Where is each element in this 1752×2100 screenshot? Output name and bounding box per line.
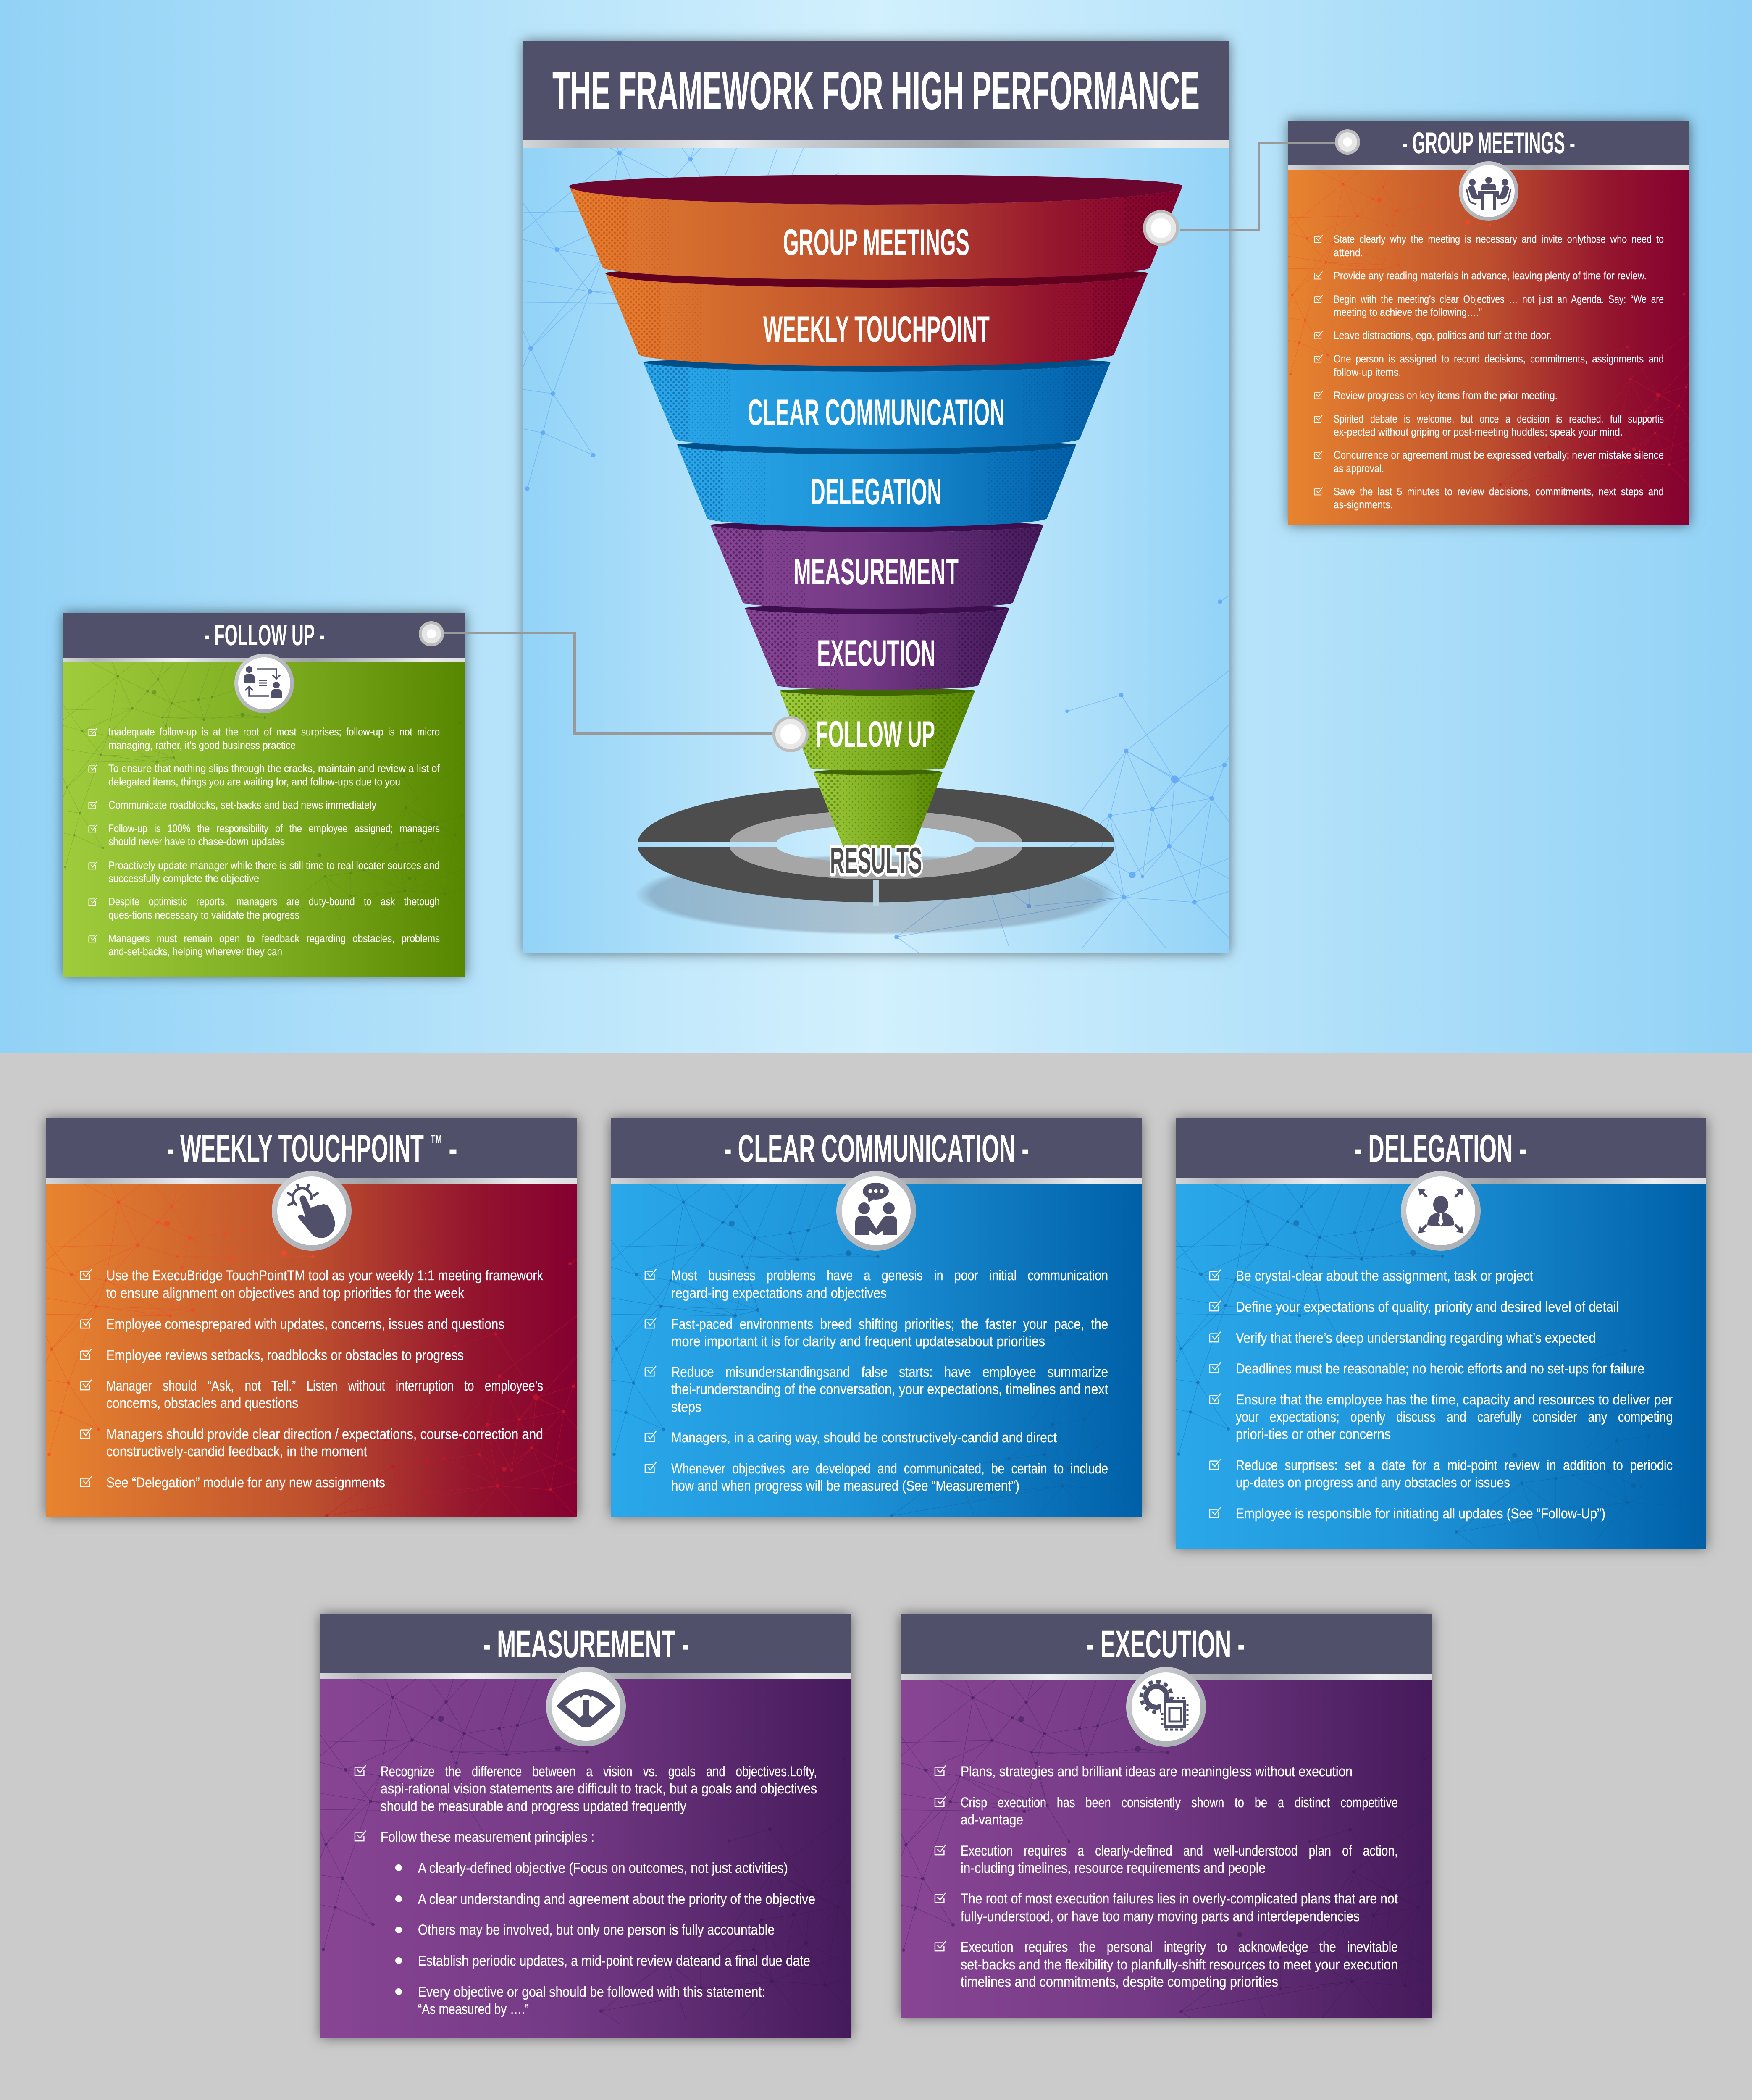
checklist: group meetings: meeting to achieve the following….” [1334,307,1482,318]
funnel segment: weekly touchpoint: WEEKLY TOUCHPOINT [763,308,990,350]
checklist: delegation: priori-ties or other concerns [1236,1426,1391,1442]
checklist: follow up [89,726,440,958]
funnel segment: group meetings: GROUP MEETINGS [783,221,969,263]
checklist: delegation: Verify that there’s deep understanding regarding what’s expected [1236,1330,1596,1346]
icon: gear and chip [1126,1667,1206,1747]
checklist: group meetings: Leave distractions, ego, politics and turf at the door. [1334,330,1552,341]
checklist: weekly touchpoint [81,1268,544,1491]
panel: group meetings [1288,121,1689,525]
checklist: clear communication: regard-ing expectations and objectives [671,1285,887,1301]
funnel segment: clear communication: CLEAR COMMUNICATION [748,391,1005,433]
checklist: clear communication: more important it is for clarity and frequent updatesabout priorities [671,1334,1045,1349]
icon: manager with arrows outward [1401,1171,1481,1251]
checklist: group meetings: Review progress on key items from the prior meeting. [1334,390,1558,402]
checklist: delegation: Be crystal-clear about the assignment, task or project [1236,1268,1533,1284]
funnel segment: delegation [677,441,1076,529]
funnel segment: group meetings [569,175,1182,286]
checklist: delegation: up-dates on progress and any obstacles or issues [1236,1475,1510,1491]
checklist: execution: ad-vantage [961,1812,1023,1828]
checklist: weekly touchpoint: See “Delegation” module for any new assignments [106,1475,385,1491]
connector: group meetings [1138,122,1365,252]
checklist: follow up: Communicate roadblocks, set-backs and bad news immediately [108,799,376,811]
checklist: execution: timelines and commitments, despite competing priorities [961,1974,1278,1990]
checklist: follow up: successfully complete the objective [108,873,259,885]
checklist: execution: in-cluding timelines, resource requirements and people [961,1860,1266,1876]
icon: two people talking [836,1171,916,1251]
funnel tip segment [811,769,945,850]
checklist: follow up: and-set-backs, helping wherever they can [108,946,282,958]
funnel segment: measurement: MEASUREMENT [793,551,959,592]
checklist: follow up: delegated items, things you are waiting for, and follow-ups due to you [108,776,400,788]
checklist: weekly touchpoint: constructively-candid feedback, in the moment [106,1444,367,1460]
icon: pointing hand touch [272,1171,352,1251]
checklist: weekly touchpoint: Employee comesprepared with updates, concerns, issues and questions [106,1316,504,1332]
checklist: delegation [1210,1268,1673,1522]
checklist: group meetings: ex-pected without griping or post-meeting huddles; speak your mind. [1334,426,1623,438]
funnel segment: delegation: DELEGATION [811,471,942,512]
checklist: weekly touchpoint: Employee reviews setbacks, roadblocks or obstacles to progress [106,1347,464,1363]
results label: RESULTS [830,840,922,881]
funnel segment: clear communication [643,357,1111,452]
checklist: execution: Plans, strategies and brilliant ideas are meaningless without execution [961,1764,1353,1780]
checklist: clear communication [645,1268,1108,1494]
checklist: group meetings: as approval. [1334,463,1384,475]
icon: people at a meeting table [1459,161,1518,221]
target ring: results [635,786,1118,935]
checklist: follow up: To ensure that nothing slips through the cracks, maintain and review a list of [108,763,440,774]
heading: - FOLLOW UP - [204,619,325,651]
checklist: group meetings: follow-up items. [1334,367,1401,378]
panel: weekly touchpoint [46,1118,577,1517]
panel: follow up [63,613,465,976]
heading: - EXECUTION - [1087,1623,1245,1666]
checklist: measurement [355,1764,817,2017]
checklist: measurement: Others may be involved, but only one person is fully accountable [418,1922,775,1938]
checklist: follow up: ques-tions necessary to validate the progress [108,909,299,921]
checklist: measurement: should be measurable and progress updated frequently [381,1798,686,1814]
panel: execution [901,1614,1432,2018]
funnel segment: execution: EXECUTION [817,632,935,674]
checklist: clear communication: Managers, in a caring way, should be constructively-candid and direct [671,1430,1057,1446]
checklist: weekly touchpoint: concerns, obstacles and questions [106,1395,298,1411]
checklist: clear communication: steps [671,1399,701,1415]
heading: - [449,1127,457,1170]
checklist: clear communication: how and when progress will be measured (See “Measurement”) [671,1478,1019,1494]
checklist: measurement: Every objective or goal should be followed with this statement: [418,1984,765,2000]
checklist: group meetings: Provide any reading materials in advance, leaving plenty of time for review. [1334,270,1647,282]
icon: gauge [546,1667,626,1746]
checklist: group meetings: attend. [1334,247,1363,259]
checklist: measurement: “As measured by ….” [418,2001,529,2017]
checklist: follow up: managing, rather, it’s good business practice [108,740,296,751]
panel: main funnel [523,41,1229,953]
checklist: group meetings [1314,234,1664,511]
funnel segment: follow up: FOLLOW UP [816,713,935,755]
checklist: weekly touchpoint: to ensure alignment on objectives and top priorities for the week [106,1285,465,1301]
panel: clear communication [611,1118,1142,1517]
funnel segment: weekly touchpoint [605,268,1148,370]
icon: follow-up exchange between two people [234,654,294,713]
checklist: follow up: should never have to chase-down updates [108,836,285,848]
checklist: group meetings: as-signments. [1334,499,1393,511]
checklist: execution: fully-understood, or have too many moving parts and interdependencies [961,1908,1360,1924]
funnel segment: follow up [777,687,977,773]
checklist: measurement: A clearly-defined objective (Focus on outcomes, not just activities) [418,1860,788,1876]
checklist: execution [935,1764,1398,1990]
checklist: measurement: Follow these measurement principles : [381,1829,594,1845]
background: sky gradient [0,0,1752,1053]
panel: delegation [1176,1118,1706,1549]
panel: measurement [320,1614,851,2038]
heading: TM [431,1133,442,1146]
funnel segment: execution [745,605,1009,693]
checklist: delegation: Deadlines must be reasonable; no heroic efforts and no set-ups for failure [1236,1361,1644,1377]
checklist: delegation: Employee is responsible for initiating all updates (See “Follow-Up”) [1236,1506,1605,1522]
heading: - DELEGATION - [1355,1127,1526,1170]
connector: follow up [416,617,811,756]
funnel segment: measurement [710,521,1043,611]
heading: - MEASUREMENT - [483,1623,689,1666]
checklist: delegation: Define your expectations of quality, priority and desired level of detail [1236,1299,1619,1315]
